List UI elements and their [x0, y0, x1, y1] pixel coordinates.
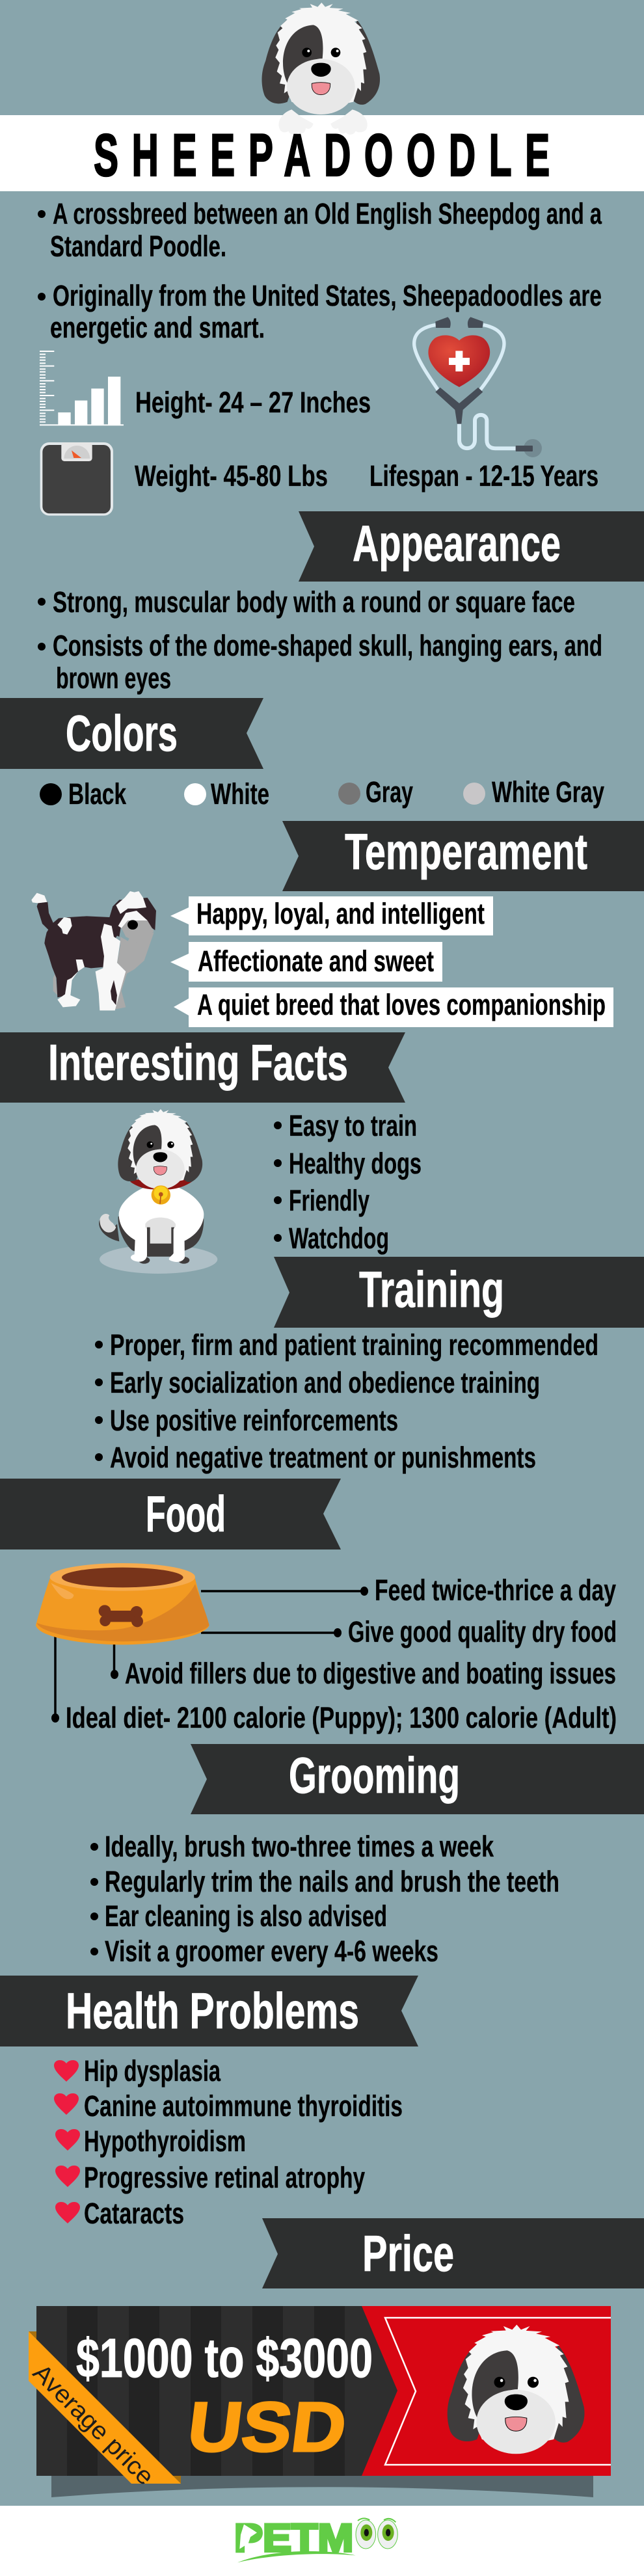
callout: affectionate: Affectionate and sweet — [198, 945, 434, 978]
banner: Temperament — [282, 821, 644, 891]
banner: Training — [274, 1257, 644, 1328]
currency: USD — [183, 2387, 351, 2466]
title: SHEEPADOODLE — [94, 122, 550, 189]
height label: Height- 24 – 27 Inches — [135, 386, 371, 419]
interesting facts list: Friendly — [289, 1184, 369, 1217]
title band — [0, 3, 644, 191]
logo: PETMOO: PETM — [234, 2516, 353, 2560]
intro text: Standard Poodle. — [50, 230, 226, 263]
color legend — [40, 775, 604, 811]
health problems list — [54, 2054, 403, 2230]
banner: Price: Price — [362, 2225, 454, 2282]
ribbon: average price: Average price — [27, 2359, 159, 2491]
intro text: energetic and smart. — [50, 311, 265, 344]
icon: food bowl — [36, 1563, 209, 1644]
banner: Health Problems — [0, 1976, 418, 2046]
banner: Appearance: Appearance — [353, 515, 561, 572]
interesting facts list — [274, 1109, 422, 1255]
training list — [95, 1328, 598, 1474]
food tips — [66, 1574, 617, 1734]
logo: PETMOO — [234, 2516, 397, 2562]
color legend: Gray — [366, 775, 413, 809]
icon: dog head with paws — [262, 3, 380, 135]
grooming list: Ear cleaning is also advised — [105, 1899, 387, 1933]
banner: Appearance — [299, 511, 644, 582]
health problems list: Hip dysplasia — [84, 2054, 221, 2087]
banner: Colors: Colors — [66, 704, 178, 762]
weight label: Weight- 45-80 Lbs — [135, 459, 328, 492]
price card — [27, 2306, 611, 2497]
banner: Training: Training — [359, 1261, 504, 1318]
color legend: White Gray — [492, 775, 604, 809]
health problems list: Cataracts — [84, 2197, 184, 2230]
training list: Use positive reinforcements — [110, 1404, 398, 1437]
intro text — [38, 197, 602, 344]
footer band — [0, 2506, 644, 2576]
icon: standing dog — [31, 891, 156, 1010]
banner: Colors — [0, 698, 263, 769]
callout: affectionate — [170, 942, 442, 982]
ribbon: average price — [27, 2331, 181, 2491]
connector dots — [51, 1587, 368, 1723]
health problems list: Hypothyroidism — [84, 2125, 246, 2158]
callout: happy — [170, 896, 493, 935]
interesting facts list: Easy to train — [289, 1109, 417, 1142]
icon: height chart — [40, 351, 124, 425]
interesting facts list: Healthy dogs — [289, 1147, 422, 1180]
health problems list: Canine autoimmune thyroiditis — [84, 2089, 403, 2123]
grooming list — [90, 1830, 559, 1968]
callout: happy: Happy, loyal, and intelligent — [196, 897, 485, 930]
banner: Health Problems: Health Problems — [66, 1982, 359, 2039]
color legend: White — [211, 777, 269, 811]
grooming list: Visit a groomer every 4-6 weeks — [105, 1935, 438, 1968]
icon: dog head — [448, 2325, 584, 2454]
appearance text — [38, 585, 602, 695]
icon: sitting dog — [99, 1109, 217, 1274]
color legend: Black — [68, 777, 127, 811]
appearance text: brown eyes — [56, 662, 171, 695]
banner: Interesting Facts — [0, 1032, 405, 1103]
banner: Price — [262, 2218, 644, 2288]
banner: Food — [0, 1479, 341, 1550]
price amount: $1000 to $3000 — [76, 2328, 373, 2389]
banner: Grooming: Grooming — [289, 1747, 460, 1804]
interesting facts list: Watchdog — [289, 1222, 389, 1255]
banner: Interesting Facts: Interesting Facts — [48, 1034, 348, 1091]
connector lines — [55, 1591, 364, 1718]
icon: weighing scale — [40, 442, 113, 516]
banner: Grooming — [191, 1744, 644, 1814]
banner: Food: Food — [146, 1485, 226, 1542]
health problems list: Progressive retinal atrophy — [84, 2161, 365, 2194]
grooming list: Ideally, brush two-three times a week — [105, 1830, 494, 1863]
icon: stethoscope and heart — [414, 317, 542, 457]
